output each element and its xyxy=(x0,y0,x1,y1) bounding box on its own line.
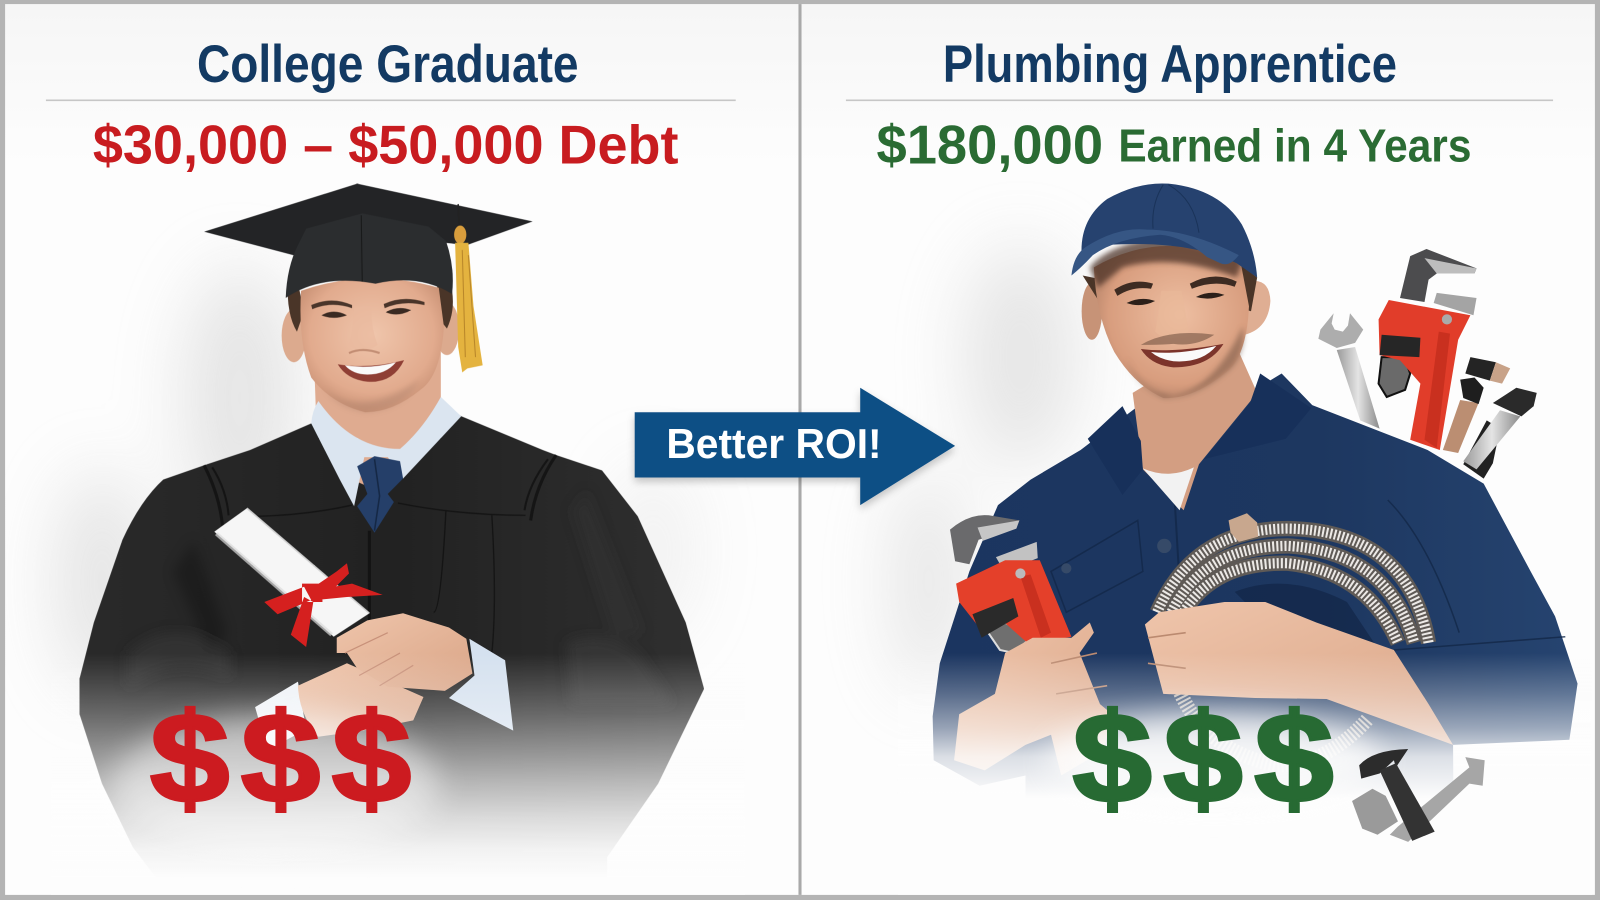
tools: hammer, wrench and fitting xyxy=(1352,749,1485,842)
panel: college graduate xyxy=(46,35,745,895)
ribbon xyxy=(264,563,383,647)
right cuff xyxy=(449,639,513,731)
tie xyxy=(357,456,403,533)
tassel xyxy=(454,204,483,372)
right hand and forearm xyxy=(1145,602,1453,745)
collar xyxy=(311,397,461,506)
tools: hose fittings xyxy=(1443,357,1537,479)
bottom fade xyxy=(898,653,1592,895)
lower hand xyxy=(298,663,423,737)
earnings label: Earned in 4 Years xyxy=(1118,120,1471,172)
fade around dollar signs xyxy=(1046,714,1383,806)
fade around dollar signs xyxy=(112,714,439,857)
facial features xyxy=(1114,276,1244,398)
diploma scroll xyxy=(214,508,369,637)
ears xyxy=(282,302,459,362)
left hand and forearm xyxy=(954,622,1112,776)
panel: plumbing apprentice xyxy=(846,35,1592,895)
shirt seams xyxy=(1050,500,1566,651)
hair sides xyxy=(288,286,453,332)
face xyxy=(300,278,444,412)
bottom fade xyxy=(51,653,745,895)
neck xyxy=(1133,347,1257,510)
gown shading xyxy=(132,558,654,696)
heading: plumbing apprentice: Plumbing Apprentice xyxy=(943,35,1397,94)
heading rule xyxy=(46,99,736,101)
left cuff xyxy=(255,682,306,750)
tools: red pipe wrench xyxy=(1379,249,1477,450)
upper hand xyxy=(337,613,472,691)
cap xyxy=(1071,183,1257,278)
left pipe wrench xyxy=(950,515,1071,653)
green dollar signs: $$$ xyxy=(1072,686,1345,829)
earnings amount: $180,000 xyxy=(877,113,1103,175)
wall shadow xyxy=(56,265,694,694)
gown xyxy=(80,415,704,894)
forehead shadow under visor xyxy=(1086,244,1242,289)
facial features xyxy=(311,299,424,412)
shirt xyxy=(933,373,1578,894)
right ear xyxy=(1245,281,1270,335)
gown folds xyxy=(204,455,556,653)
red dollar signs: $$$ xyxy=(150,686,423,829)
tools: silver wrench xyxy=(1318,313,1380,429)
wall shadow xyxy=(893,245,1077,694)
figure: graduate xyxy=(51,184,745,895)
mortarboard cap xyxy=(204,184,533,298)
shirt buttons xyxy=(1061,539,1171,573)
left ear xyxy=(1082,283,1102,340)
shadow under hose xyxy=(1235,584,1378,653)
hose coil xyxy=(1157,529,1429,765)
arrow label: Better ROI! xyxy=(666,420,882,467)
heading: college graduate: College Graduate xyxy=(197,35,579,94)
figure: plumber xyxy=(893,183,1592,895)
debt amount: $30,000 – $50,000 Debt xyxy=(93,113,679,175)
hose fitting xyxy=(1229,513,1258,542)
shirt collar xyxy=(1088,374,1270,470)
finger lines xyxy=(1051,633,1186,694)
neck xyxy=(314,352,441,490)
hair xyxy=(1082,266,1258,312)
face xyxy=(1094,246,1249,398)
arrow: better ROI xyxy=(635,388,955,505)
heading rule xyxy=(846,99,1553,101)
undershirt xyxy=(1143,467,1194,510)
